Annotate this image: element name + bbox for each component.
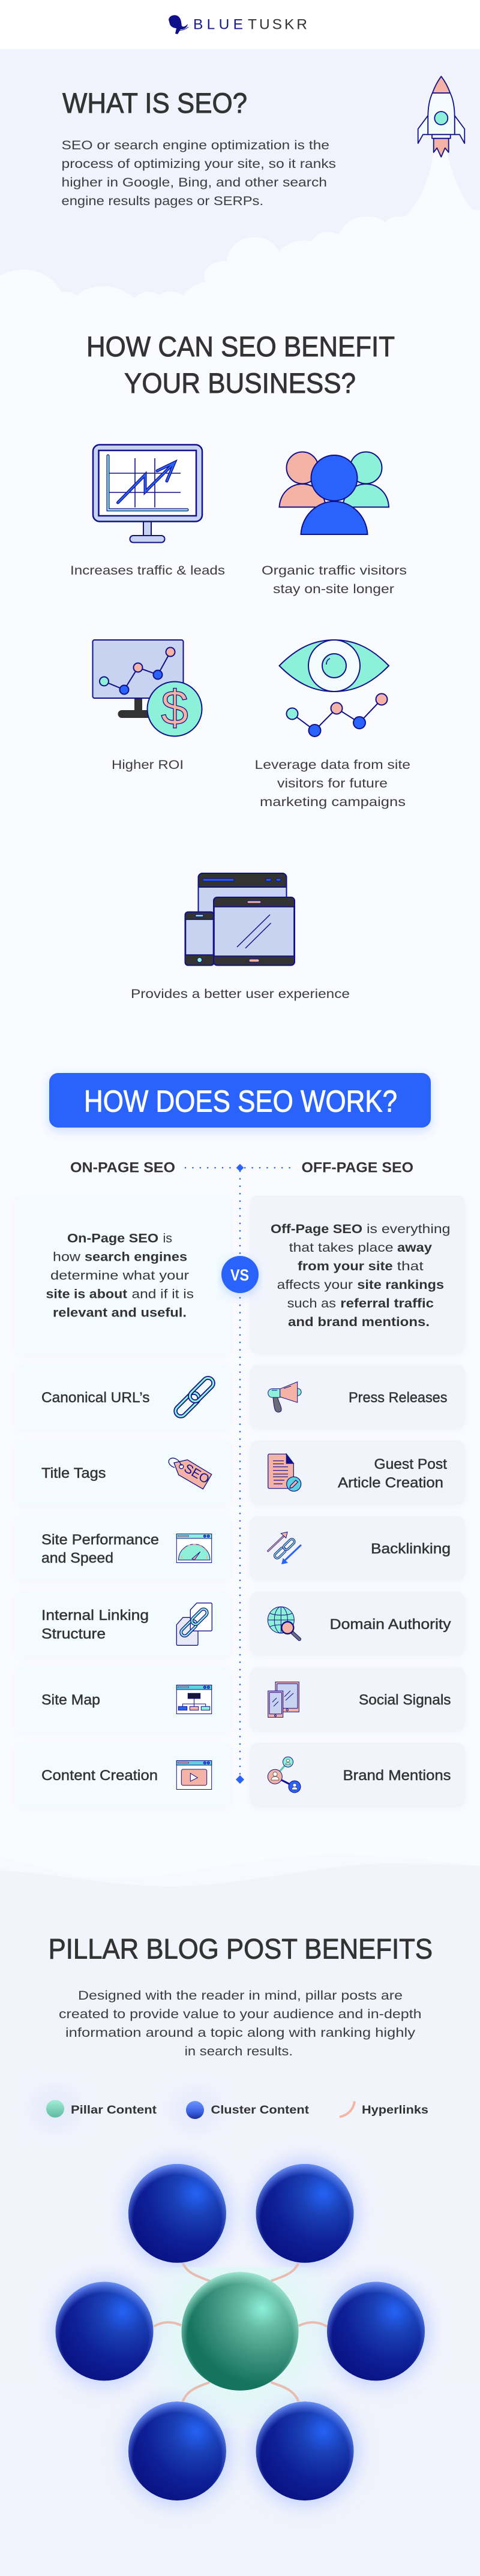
row: brand mentions: Brand Mentions: [343, 1768, 451, 1784]
row: domain authority: [250, 1592, 466, 1657]
icon: speed gauge window: [176, 1534, 212, 1563]
legend: [31, 2087, 428, 2132]
panel: on-page definition: relevant and useful.: [53, 1306, 187, 1320]
panel: off-page definition: and brand mentions.: [288, 1315, 430, 1329]
icon: tablet and phone: [268, 1682, 299, 1717]
icon: backlink arrows and chain: [268, 1532, 301, 1564]
row: site performance and speed: and Speed: [41, 1550, 113, 1567]
legend: pillar content: [46, 2100, 157, 2118]
panel: off-page definition: affects your: [277, 1278, 353, 1292]
icon: rocket: [418, 76, 464, 157]
row: content creation: Content Creation: [41, 1768, 158, 1784]
text block: SEO definition: engine results pages or SERPs.: [61, 194, 263, 208]
row: social signals: Social Signals: [359, 1692, 451, 1708]
icon: megaphone: [268, 1382, 301, 1412]
panel: off-page definition: such as: [287, 1297, 336, 1310]
panel: on-page definition: [14, 1195, 231, 1354]
panel: on-page definition: is: [163, 1232, 172, 1246]
panel: off-page definition: site rankings: [357, 1278, 444, 1292]
banner: how does SEO work: HOW DOES SEO WORK?: [84, 1084, 397, 1118]
badge: VS: [221, 1256, 259, 1293]
panel: on-page definition: On-Page SEO: [67, 1232, 158, 1246]
row: site map: Site Map: [41, 1692, 100, 1708]
icon: chain link: [173, 1376, 215, 1418]
panel: off-page definition: is everything: [367, 1222, 450, 1236]
text block: pillar description: information around a topic along with ranking highly: [65, 2025, 415, 2040]
header logo band: [0, 0, 480, 49]
icon: document with pencil: [268, 1454, 301, 1491]
connectors: hyperlinks: [154, 2263, 327, 2401]
benefit: leverage data: Leverage data from site: [254, 758, 410, 772]
text block: SEO definition: higher in Google, Bing, and other search: [61, 175, 327, 190]
icon: chart monitor with dollar coin: $: [161, 681, 188, 735]
row: content creation: [14, 1743, 231, 1808]
text block: SEO definition: SEO or search engine optimization is the: [61, 138, 329, 152]
icon: eye with data line: [280, 640, 389, 737]
text block: SEO definition: [61, 138, 336, 208]
legend: pillar content: Pillar Content: [71, 2104, 157, 2117]
row: backlinking: [250, 1516, 466, 1581]
benefit: organic traffic visitors: [262, 452, 407, 596]
banner: how does SEO work: [49, 1073, 431, 1128]
benefit: higher ROI: Higher ROI: [112, 758, 184, 772]
text block: pillar description: [59, 1988, 421, 2058]
icon: elephant head: [169, 15, 188, 34]
heading: what is SEO: WHAT IS SEO?: [62, 87, 247, 119]
benefit: increases traffic and leads: [70, 445, 225, 578]
cluster content left: [55, 2282, 154, 2380]
row: canonical URLs: Canonical URL’s: [41, 1390, 149, 1406]
benefit: increases traffic and leads: Increases traffic & leads: [70, 563, 225, 578]
legend: hyperlinks: [340, 2102, 428, 2117]
icon: chart monitor with dollar coin: [92, 640, 202, 737]
benefit: leverage data: [254, 640, 410, 809]
row: press releases: [250, 1365, 466, 1430]
text block: pillar description: in search results.: [185, 2044, 293, 2058]
row: title tags: [14, 1441, 231, 1505]
pillar content center: [181, 2272, 299, 2391]
row: guest post article creation: Article Creation: [338, 1475, 443, 1491]
panel: off-page definition: that: [397, 1260, 424, 1273]
panel: off-page definition: from your site: [298, 1260, 393, 1273]
section background: what is SEO: [0, 49, 480, 301]
text block: pillar description: Designed with the reader in mind, pillar posts are: [78, 1988, 403, 2003]
benefit: leverage data: visitors for future: [277, 776, 388, 790]
row: brand mentions: [250, 1743, 466, 1808]
panel: off-page definition: Off-Page SEO: [271, 1222, 362, 1236]
heading: how can SEO benefit your business: YOUR BUSINESS?: [124, 367, 356, 399]
benefit: higher ROI: [92, 640, 202, 772]
text block: SEO definition: process of optimizing your site, so it ranks: [61, 157, 336, 171]
row: internal linking structure: Structure: [41, 1626, 106, 1642]
panel: off-page definition: away: [397, 1241, 432, 1255]
logo: BlueTuskr: TUSKR: [248, 17, 307, 32]
icon: monitor with rising chart: [93, 445, 202, 542]
diamond bottom: [236, 1775, 244, 1784]
panel: on-page definition: how: [53, 1251, 81, 1264]
panel: on-page definition: and if it is: [132, 1288, 194, 1301]
glow: [50, 2158, 430, 2506]
row: site performance and speed: [14, 1516, 231, 1581]
badge: VS: VS: [230, 1266, 249, 1284]
panel: on-page definition: determine what your: [50, 1269, 189, 1283]
icon: group of people: [280, 452, 389, 534]
column title: on-page SEO: ON-PAGE SEO: [70, 1160, 175, 1176]
dotted divider: [185, 1168, 295, 1775]
benefit: better user experience: [131, 873, 350, 1001]
icon: SEO tag: [169, 1458, 212, 1489]
benefit: organic traffic visitors: stay on-site longer: [273, 582, 394, 596]
cluster content right: [327, 2282, 425, 2380]
clouds and rocket trail: [0, 150, 480, 312]
panel: on-page definition: search engines: [85, 1251, 187, 1264]
row: site map: [14, 1667, 231, 1732]
row: domain authority: Domain Authority: [330, 1616, 451, 1633]
icon: linked files: [176, 1603, 212, 1645]
row: guest post article creation: Guest Post: [374, 1456, 447, 1472]
heading: pillar blog post benefits: PILLAR BLOG POST BENEFITS: [49, 1932, 433, 1965]
cluster content bottom right: [256, 2401, 354, 2500]
logo: BlueTuskr: [169, 15, 307, 34]
heading: how can SEO benefit your business: [86, 330, 395, 399]
cluster content top right: [256, 2164, 354, 2263]
benefit: organic traffic visitors: Organic traffic visitors: [262, 563, 407, 578]
panel: off-page definition: that takes place: [289, 1241, 394, 1255]
panel: off-page definition: referral traffic: [340, 1297, 434, 1310]
column title: off-page SEO: OFF-PAGE SEO: [301, 1160, 413, 1176]
diamond top: [236, 1164, 244, 1171]
row: guest post article creation: [250, 1441, 466, 1505]
cluster content bottom left: [128, 2401, 226, 2500]
legend: cluster content: Cluster Content: [211, 2104, 310, 2117]
row: internal linking structure: Internal Linking: [41, 1607, 149, 1624]
cluster content top left: [128, 2164, 226, 2263]
panel: off-page definition: [250, 1195, 466, 1354]
icon: desktop tablet phone: [185, 873, 295, 966]
heading: how can SEO benefit your business: HOW CAN SEO BENEFIT: [86, 330, 395, 362]
row: site performance and speed: Site Performance: [41, 1532, 159, 1548]
benefit: leverage data: marketing campaigns: [260, 795, 406, 809]
legend: cluster content: [186, 2101, 310, 2119]
row: social signals: [250, 1667, 466, 1732]
logo: BlueTuskr: BLUE: [193, 17, 243, 32]
panel: on-page definition: site is about: [46, 1288, 127, 1301]
icon: SEO tag: SEO: [182, 1462, 212, 1487]
row: internal linking structure: [14, 1592, 231, 1657]
legend: hyperlinks: Hyperlinks: [362, 2104, 428, 2117]
text block: pillar description: created to provide value to your audience and in-depth: [59, 2007, 421, 2021]
icon: connected people nodes: [268, 1757, 301, 1793]
row: press releases: Press Releases: [349, 1390, 448, 1406]
icon: video window: [176, 1761, 212, 1790]
benefit: better user experience: Provides a better user experience: [131, 987, 350, 1001]
row: title tags: Title Tags: [41, 1465, 106, 1481]
row: backlinking: Backlinking: [371, 1541, 451, 1557]
icon: globe with magnifier: [268, 1607, 299, 1639]
row: canonical URLs: [14, 1365, 231, 1430]
icon: sitemap window: [176, 1685, 212, 1714]
pillar cluster diagram: [50, 2158, 430, 2506]
wave background: [0, 1855, 480, 2576]
